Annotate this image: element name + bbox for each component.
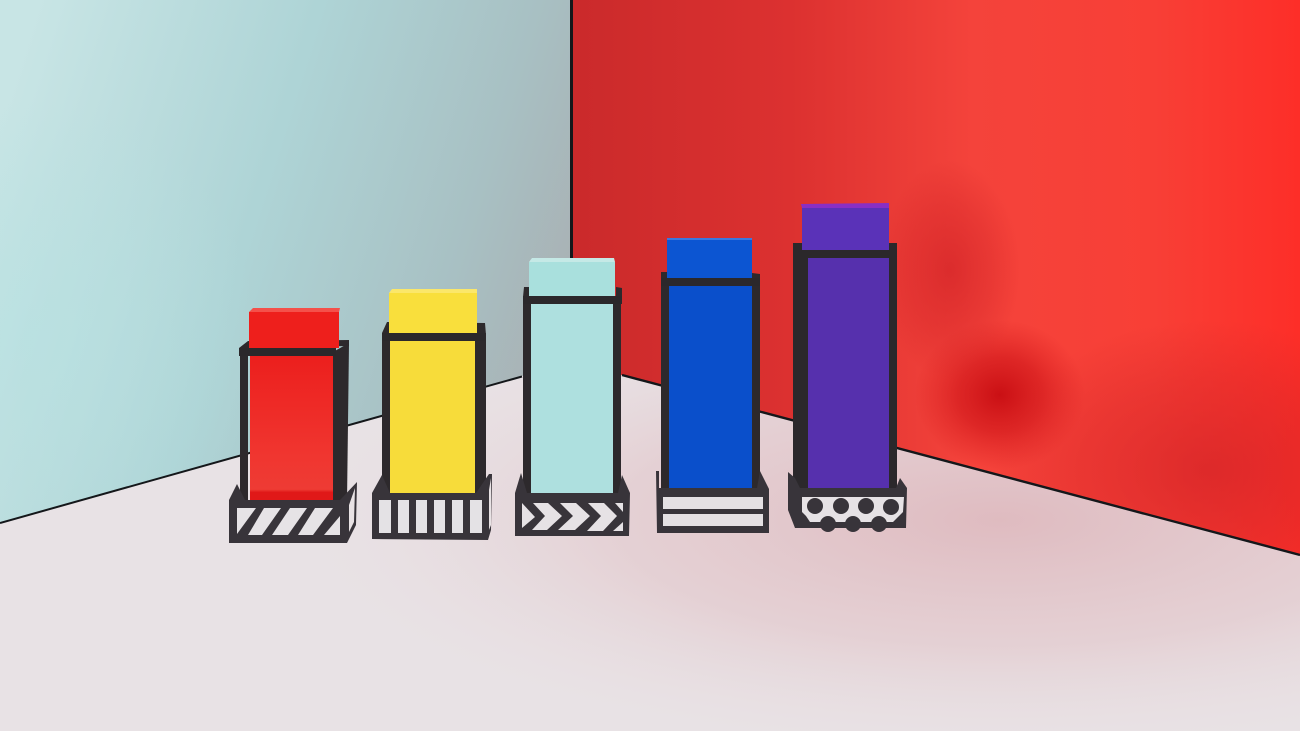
red frame front bar	[239, 348, 336, 356]
column 5: purple with polka-dot base	[788, 203, 907, 532]
blue body	[669, 286, 752, 489]
column 2: yellow with vertical-stripe base	[372, 289, 492, 540]
red base	[229, 482, 357, 543]
purple lid	[801, 203, 889, 250]
wall edges: black trim lines	[0, 0, 1300, 555]
background: floor	[4, 375, 1300, 670]
mint frame back and legs	[523, 287, 622, 495]
purple frame back and legs	[793, 243, 897, 491]
column 4: blue with horizontal-stripe base	[656, 238, 769, 533]
yellow lid	[389, 289, 477, 333]
blue front bar	[661, 278, 760, 286]
column 1: red with diagonal-stripe base	[229, 308, 357, 543]
column 3: mint with chevron base	[515, 258, 630, 536]
background: pale blue wall	[0, 0, 572, 580]
blue frame back and legs	[661, 272, 760, 490]
yellow front bar	[382, 333, 485, 341]
mint front bar	[523, 296, 622, 304]
yellow frame back and legs	[382, 322, 486, 495]
purple base	[788, 472, 907, 532]
purple body	[808, 258, 889, 489]
mint body	[531, 304, 613, 494]
background: red wall	[573, 0, 1300, 554]
blue base	[656, 471, 769, 533]
mint base	[515, 473, 630, 536]
mint lid	[529, 258, 615, 296]
blue lid	[667, 238, 752, 278]
yellow base	[372, 474, 492, 540]
red frame back and legs	[239, 340, 349, 502]
red body	[250, 356, 333, 501]
red lid	[249, 308, 340, 348]
yellow body	[390, 341, 475, 494]
